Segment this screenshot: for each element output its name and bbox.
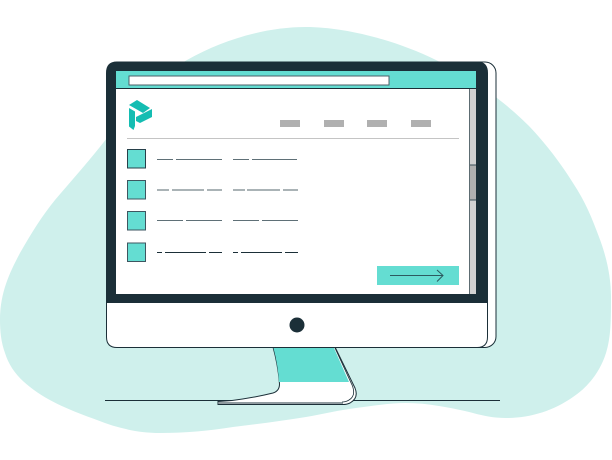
logo (129, 100, 152, 130)
scrollbar (470, 89, 476, 294)
power button (290, 318, 304, 332)
monitor stand (218, 347, 356, 404)
stand base edge (218, 402, 343, 404)
stand inner edge (335, 348, 354, 402)
scrollbar thumb (470, 165, 476, 200)
navigation items (280, 120, 431, 127)
next button (377, 266, 459, 285)
list row 3 (128, 212, 298, 230)
list row 4 (128, 243, 298, 262)
browser toolbar (116, 71, 476, 88)
stand teal panel (274, 348, 349, 382)
monitor back shell (112, 62, 496, 348)
screen (116, 89, 476, 294)
ground line (105, 400, 500, 402)
arrow (390, 270, 443, 282)
address bar (129, 76, 389, 85)
list row 2 (128, 180, 298, 199)
header divider (127, 138, 459, 140)
monitor bezel (106, 62, 488, 303)
monitor chin (106, 300, 488, 348)
list row 1 (128, 150, 297, 168)
